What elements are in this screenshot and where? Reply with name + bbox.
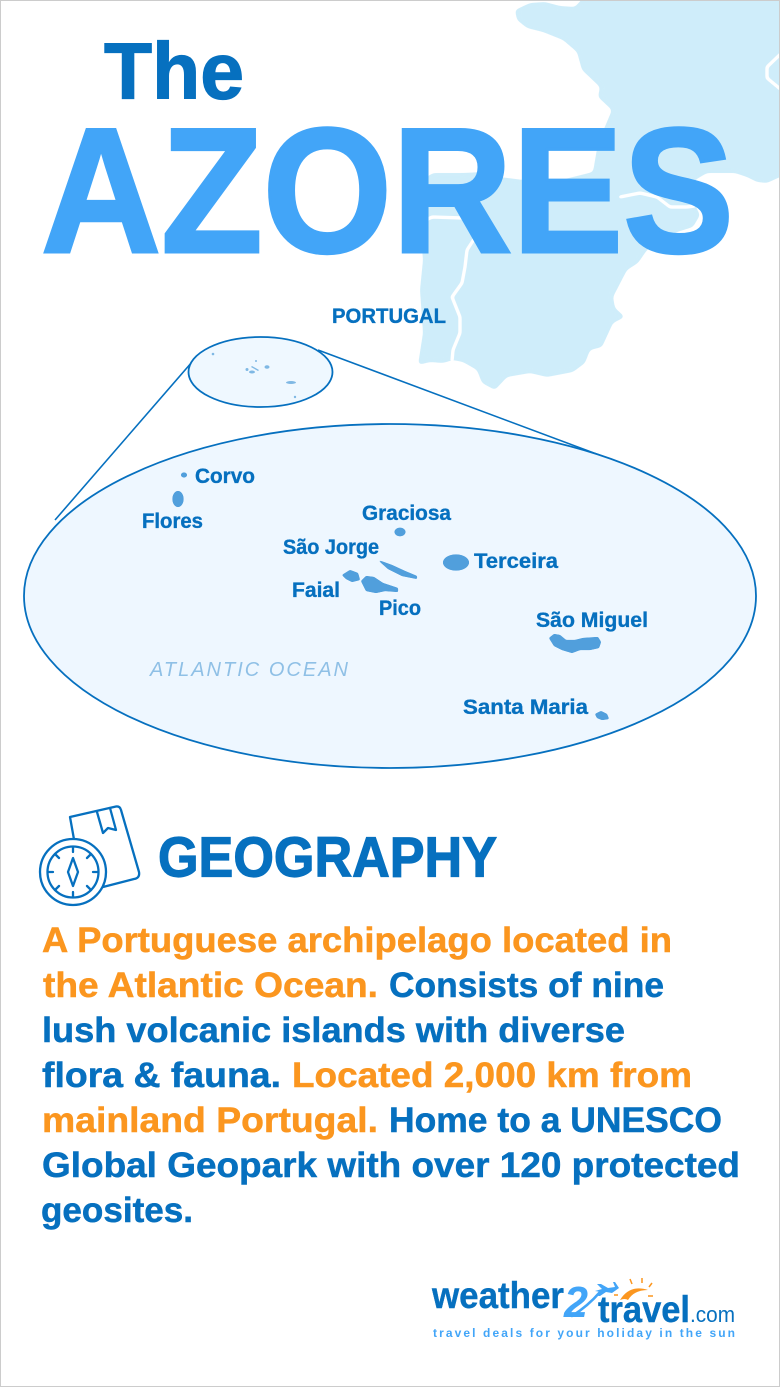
label: Atlantic Ocean: ATLANTIC OCEAN (149, 659, 349, 681)
logo: weather2travel.com: weather (431, 1275, 564, 1316)
logo: weather2travel.com: travel (598, 1289, 690, 1330)
paragraph: geography facts: geosites. (41, 1191, 193, 1230)
island labels: Santa Maria (463, 696, 588, 719)
island labels: Flores (142, 510, 203, 533)
heading: Geography: GEOGRAPHY (158, 826, 497, 890)
island labels: São Jorge (283, 536, 379, 559)
paragraph: geography facts: mainland Portugal. (42, 1101, 378, 1140)
paragraph: geography facts: Located 2,000 km from (292, 1056, 692, 1095)
island labels: Terceira (474, 550, 558, 573)
zoom connector lines (55, 350, 610, 520)
inset map: enlarged Azores ellipse (24, 424, 756, 768)
locator ellipse (188, 337, 332, 407)
map: France and Iberian peninsula (417, 0, 780, 390)
paragraph: geography facts: the Atlantic Ocean. (43, 966, 378, 1005)
island labels: Faial (292, 579, 340, 602)
island labels: São Miguel (536, 609, 648, 632)
paragraph: geography facts: A Portuguese archipelago located in (42, 921, 672, 960)
title: AZORES: AZORES (41, 91, 734, 290)
logo: weather2travel.com: travel deals for your holiday in the sun (433, 1326, 735, 1340)
island labels: Pico (379, 597, 421, 620)
islands (172, 472, 609, 720)
icon: sun (614, 1278, 653, 1300)
swoosh (572, 1292, 600, 1316)
paragraph: geography facts: Consists of nine (389, 966, 664, 1005)
island labels: Graciosa (362, 502, 451, 525)
logo: weather2travel.com (431, 1275, 735, 1340)
paragraph: geography facts: Home to a UNESCO (389, 1101, 722, 1140)
paragraph: geography facts: lush volcanic islands with diverse (42, 1011, 625, 1050)
label: Portugal: PORTUGAL (332, 305, 446, 328)
icon: plane (595, 1282, 619, 1296)
logo: weather2travel.com: 2 (563, 1278, 589, 1327)
icon: map and compass (40, 806, 139, 905)
island labels (142, 465, 648, 719)
paragraph: geography facts: flora & fauna. (42, 1056, 281, 1095)
paragraph: geography facts (41, 921, 740, 1230)
island labels: Corvo (195, 465, 255, 488)
logo: weather2travel.com: .com (690, 1302, 735, 1327)
title: The: The (104, 26, 244, 116)
paragraph: geography facts: Global Geopark with over 120 protected (42, 1146, 740, 1185)
